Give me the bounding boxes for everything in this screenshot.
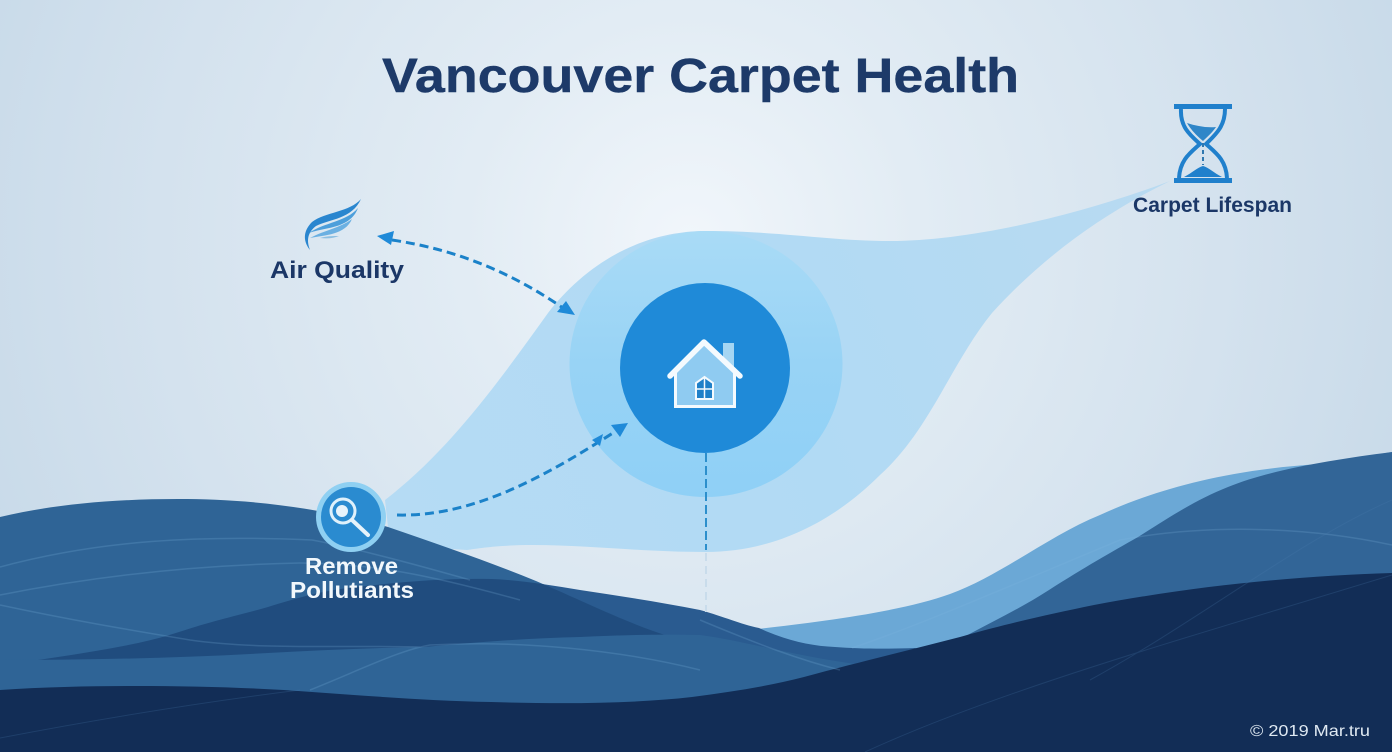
icon: house	[670, 342, 740, 406]
label: carpet lifespan: Carpet Lifespan	[1133, 194, 1292, 217]
icon: wind	[305, 199, 361, 250]
wave: mid blue upper layer	[38, 579, 960, 700]
wave: light blue right	[740, 452, 1392, 700]
outer hub circle	[570, 231, 842, 497]
wave: medium blue left hill	[0, 499, 665, 720]
label: remove pollutiants: Remove	[305, 553, 398, 579]
inner hub circle	[620, 283, 790, 453]
wave: navy foreground	[0, 573, 1392, 752]
arrow: pollutants to hub	[397, 423, 628, 515]
wave: dark blue mid	[40, 579, 663, 660]
faint wave lines	[0, 529, 1392, 690]
dashed line below hub	[705, 453, 707, 612]
copyright: © 2019 Mar.tru	[1250, 723, 1370, 740]
wave: medium blue right	[940, 452, 1392, 700]
icon: hourglass	[1174, 104, 1232, 183]
label: remove pollutiants	[290, 553, 414, 603]
wave: medium blue band	[0, 635, 855, 720]
icon: magnifying glass badge	[316, 482, 386, 552]
label: remove pollutiants: Pollutiants	[290, 577, 414, 603]
arrow: hub to air quality	[377, 231, 575, 315]
title: Vancouver Carpet Health	[382, 50, 1019, 103]
faint navy lines	[0, 500, 1392, 752]
flow shape behind the hub	[385, 181, 1170, 552]
label: air quality: Air Quality	[270, 257, 405, 284]
